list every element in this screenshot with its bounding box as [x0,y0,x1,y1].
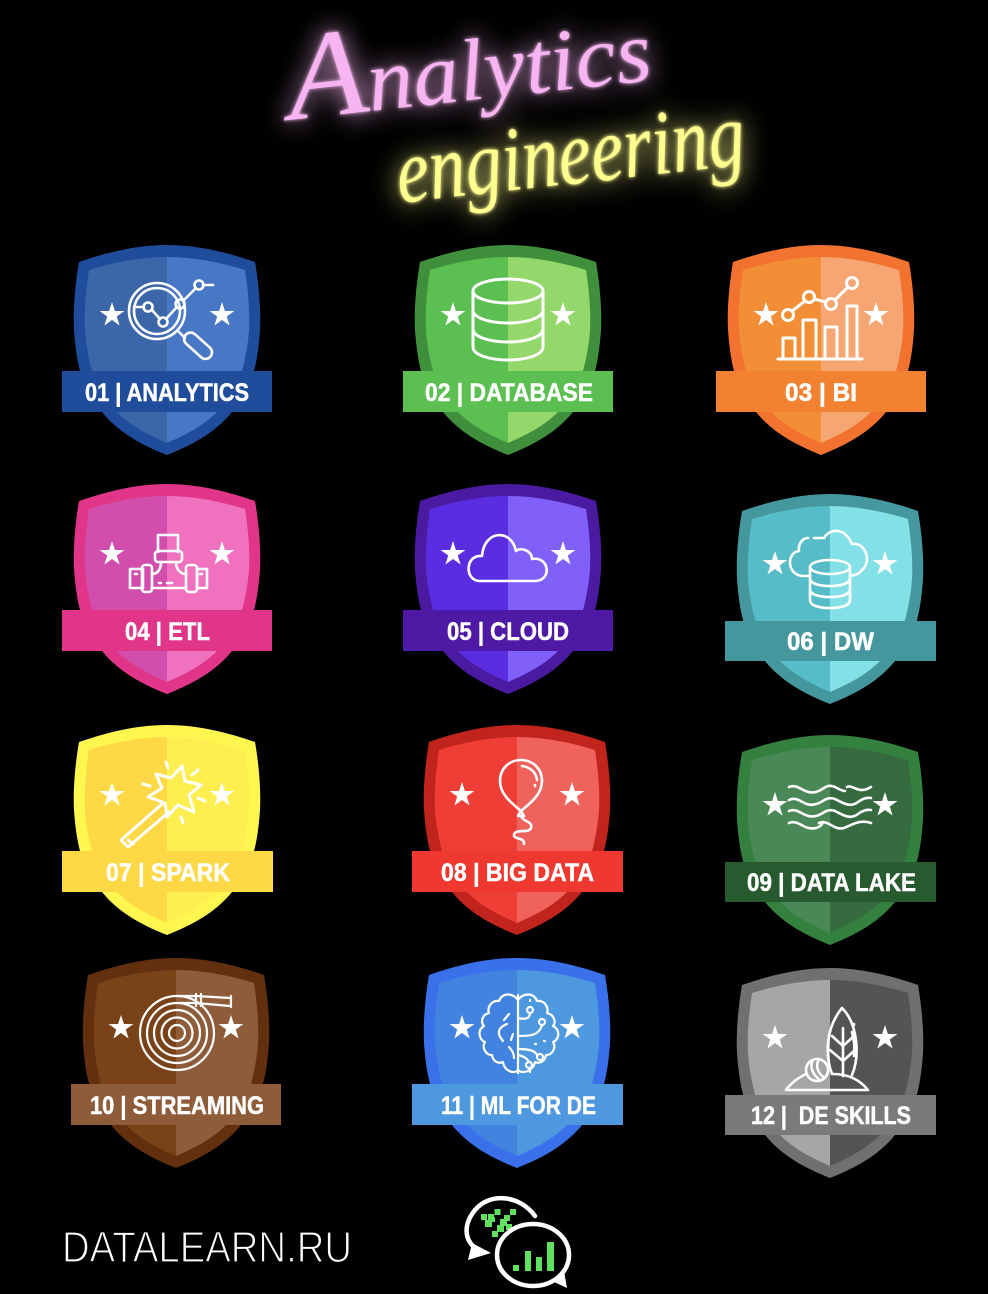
label: 08 | BIG DATA [441,859,594,887]
badge 09 data lake [725,735,936,945]
icon: bar chart with line [778,278,862,359]
label: 02 | DATABASE [425,379,593,407]
title: Analytics: Analytics [272,0,657,148]
label: 04 | ETL [125,618,210,646]
label: 01 | ANALYTICS [85,379,249,407]
bubble with scattered squares [467,1198,535,1260]
label: 11 | ML FOR DE [441,1092,596,1120]
label: 09 | DATA LAKE [747,869,916,897]
icon: leaf and seed [786,1008,868,1090]
icon: fire hose [140,994,231,1070]
icon: pipe valve [130,535,207,592]
icon: cloud with database [790,531,867,608]
badge 04 ETL [62,484,272,694]
badge 07 spark [62,725,273,935]
badge 03 BI [716,245,926,455]
badge 02 database [403,245,613,455]
icon: waves [789,786,871,828]
title: engineering: engineering [390,83,750,223]
icon: magic wand [121,762,205,847]
label: 10 | STREAMING [90,1092,264,1120]
icon: magnifier with chart [129,280,215,362]
footer brand text: DATALEARN.RU [62,1223,352,1272]
icon: cloud [469,535,547,581]
label: 12 | DE SKILLS [751,1102,911,1130]
badge 12 DE skills [725,968,936,1178]
label: 06 | DW [787,628,874,656]
label: 03 | BI [785,379,857,407]
logo: chat bubbles [467,1198,569,1288]
badge 10 streaming [71,958,281,1168]
icon: brain [480,994,558,1073]
icon: balloon [500,760,542,844]
badge 06 DW [725,494,936,704]
label: 07 | SPARK [106,859,230,887]
badge 01 analytics [62,245,272,455]
label: 05 | CLOUD [447,618,569,646]
badge 11 ML for DE [412,958,623,1168]
icon: database [473,279,543,360]
badge 05 cloud [403,484,613,694]
badge 08 big data [412,725,623,935]
bubble with bars [497,1224,569,1288]
